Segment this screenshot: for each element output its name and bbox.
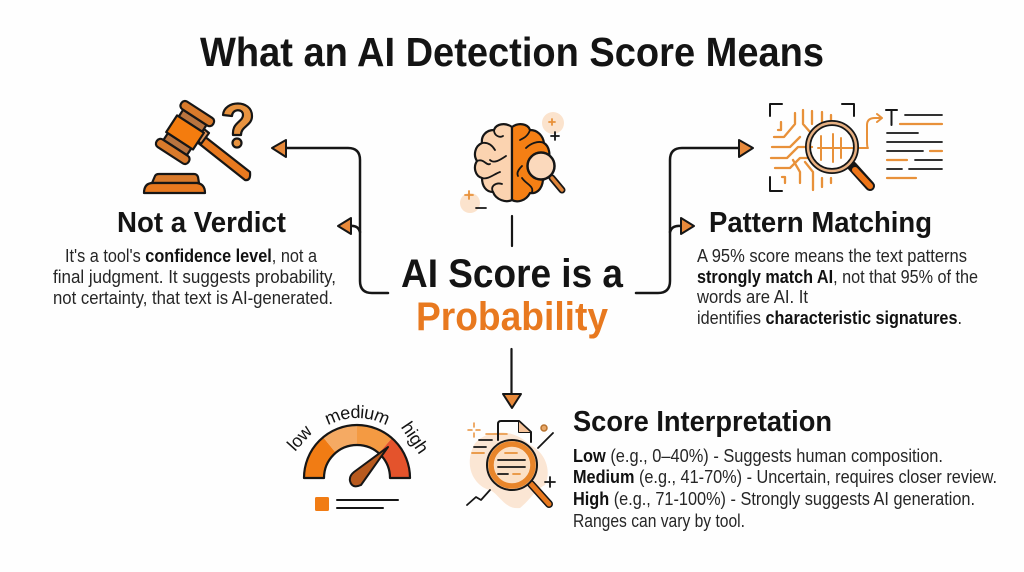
text block: pattern matching: words are AI. It [696, 287, 808, 307]
connector: brain to score [511, 216, 513, 246]
text block: score interpretation: Ranges can vary by tool. [573, 511, 745, 531]
text block: pattern matching: A 95% score means the text patterns [697, 246, 967, 266]
text block: score interpretation [573, 446, 997, 531]
icon: document under magnifier [467, 421, 555, 508]
arrow: score down to interpretation [503, 349, 521, 408]
arrow: score to pattern matching [636, 140, 753, 293]
text block: score interpretation: High (e.g., 71-100%) - Strongly suggests AI generation. [573, 489, 975, 509]
center heading: AI score is a probability: AI Score is a [401, 252, 624, 296]
heading: pattern matching: Pattern Matching [709, 207, 932, 239]
center heading: AI score is a probability [401, 252, 624, 339]
text block: pattern matching: identifies characteristic signatures. [697, 308, 962, 328]
title: What an AI Detection Score Means [200, 29, 824, 75]
text block: pattern matching [696, 246, 978, 328]
icon: gavel with question mark [144, 99, 252, 193]
text block: not a verdict: final judgment. It suggests probability, [53, 267, 336, 287]
icon: gauge low medium high: high [397, 418, 433, 457]
text block: score interpretation: Low (e.g., 0–40%) - Suggests human composition. [573, 446, 943, 466]
arrow: score to not a verdict [272, 140, 388, 293]
text block: score interpretation: Medium (e.g., 41-70%) - Uncertain, requires closer review. [573, 467, 997, 487]
heading: score interpretation: Score Interpretation [573, 406, 832, 438]
text block: not a verdict: It's a tool's confidence level, not a [65, 246, 318, 266]
text block: not a verdict [53, 246, 336, 308]
icon: gauge low medium high: medium [325, 404, 388, 425]
center heading: AI score is a probability: Probability [416, 295, 609, 339]
heading: not a verdict: Not a Verdict [117, 207, 286, 239]
text block: not a verdict: not certainty, that text is AI-generated. [53, 288, 333, 308]
icon: pattern scan with text lines [770, 104, 942, 191]
text block: pattern matching: strongly match AI, not that 95% of the [697, 267, 978, 287]
icon: gauge low medium high: low [283, 421, 317, 455]
icon: gauge low medium high [283, 404, 433, 511]
icon: brain with magnifier [460, 112, 564, 213]
